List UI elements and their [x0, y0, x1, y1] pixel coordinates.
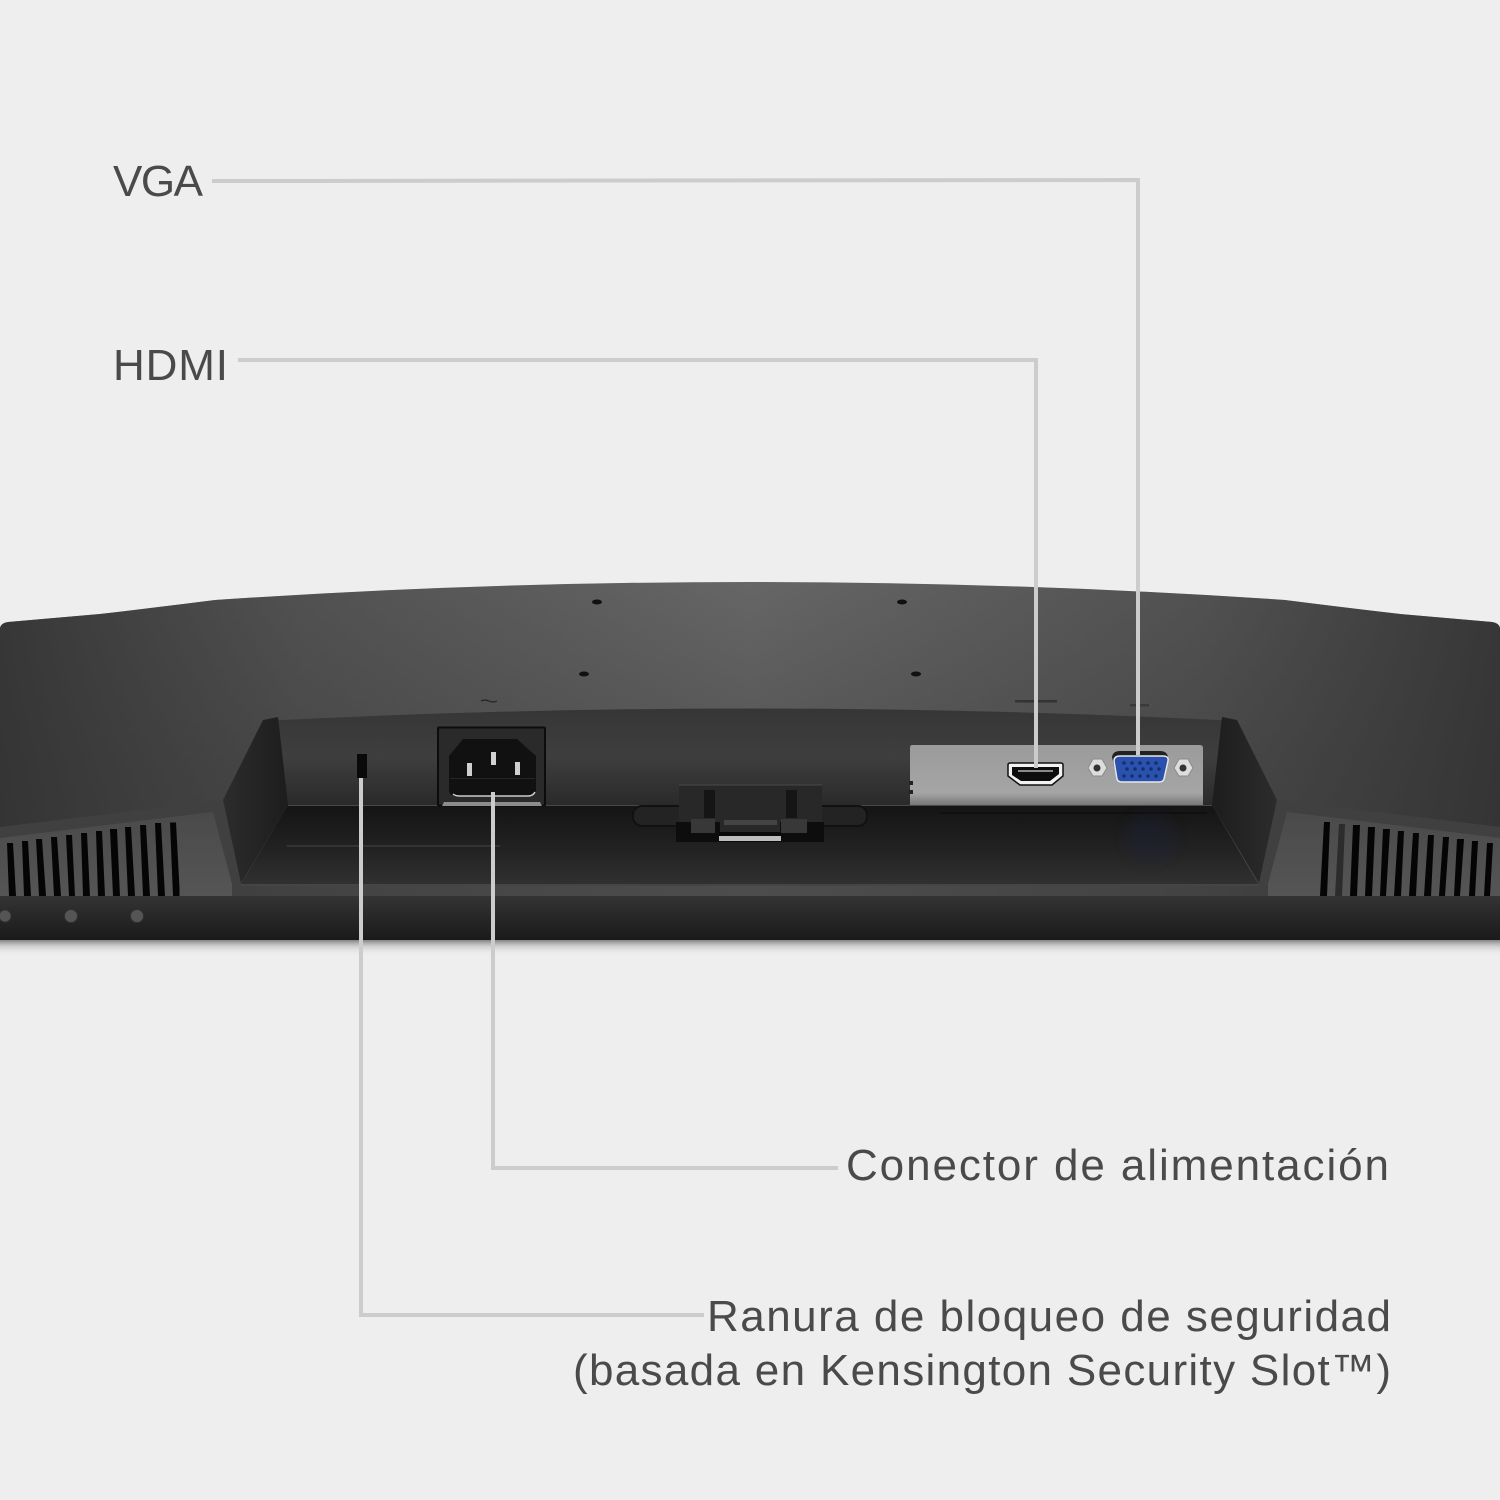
control buttons: [0, 910, 144, 922]
recess right side: [1212, 717, 1277, 883]
VGA right screw: [1174, 759, 1193, 776]
left vent panel: [0, 800, 241, 896]
monitor rear view: [0, 582, 1500, 956]
recess floor: [241, 805, 1258, 884]
power connector: [438, 728, 545, 806]
label: security slot: Ranura de bloqueo de seguridad: [707, 1292, 1391, 1341]
leader line: HDMI: [238, 360, 1036, 768]
port labels on body: [481, 700, 1149, 706]
floor lines: [287, 845, 500, 847]
recess left side: [223, 717, 288, 883]
HDMI port: [1008, 763, 1063, 785]
mounting holes: [579, 600, 921, 676]
leader line: power connector: [493, 792, 838, 1168]
monitor body: [0, 582, 1500, 940]
stand clip bracket: [633, 785, 867, 842]
port recess: [223, 708, 1277, 886]
VGA port: [1112, 751, 1168, 782]
label: security slot: [573, 1292, 1391, 1395]
right vent panel: [1259, 800, 1500, 896]
label: power connector: Conector de alimentación: [846, 1141, 1389, 1190]
label: VGA: VGA: [113, 157, 204, 206]
VGA left screw: [1088, 759, 1107, 776]
leader line: VGA: [212, 180, 1138, 755]
lower bezel strip: [0, 896, 1500, 940]
security lock slot: [357, 754, 367, 778]
VGA reflection on floor: [1124, 814, 1176, 862]
label: security slot: (basada en Kensington Security Slot™): [573, 1346, 1391, 1395]
monitor shadow: [0, 940, 1500, 956]
leader line: security slot: [361, 778, 704, 1315]
recess back wall: [262, 708, 1238, 805]
I/O plate: [909, 745, 1203, 805]
label: HDMI: HDMI: [113, 341, 228, 390]
